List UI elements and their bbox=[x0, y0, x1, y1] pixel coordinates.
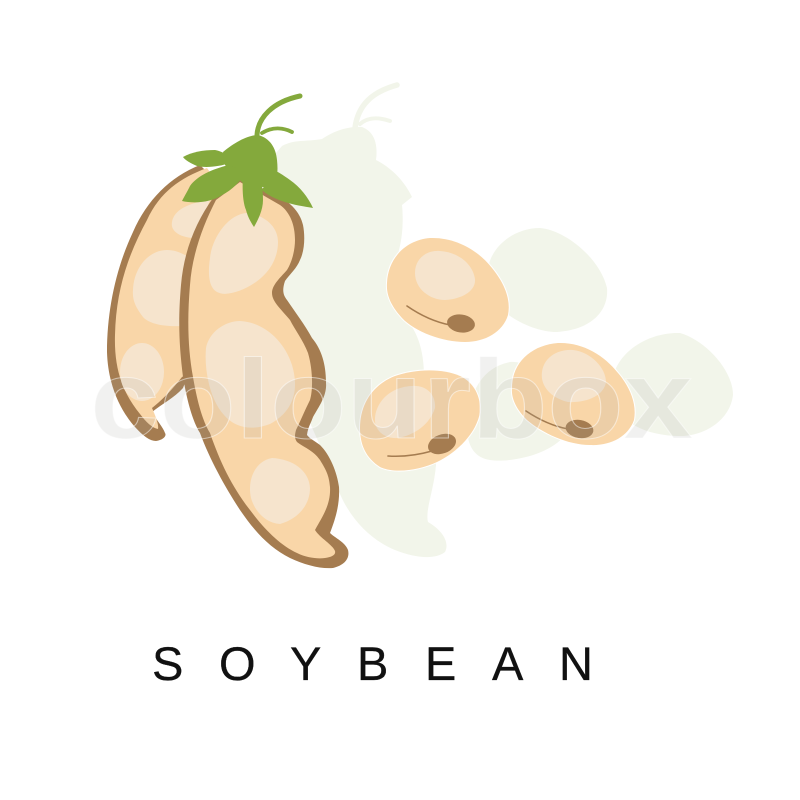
shadow: bean 1 bbox=[487, 228, 607, 332]
shadow: tendril bbox=[360, 118, 390, 124]
front pod fill bbox=[188, 182, 335, 558]
back pod outline bbox=[107, 165, 225, 441]
pale shadow of the pods bbox=[265, 85, 446, 557]
back pod seed bumps bbox=[120, 200, 210, 401]
back pod fill bbox=[115, 168, 230, 429]
bean 2 body bbox=[360, 370, 480, 471]
bean 2 hilum bbox=[425, 430, 459, 458]
calyx and stem bbox=[182, 96, 313, 227]
bean 3 body bbox=[512, 343, 635, 445]
calyx lower-left leaf bbox=[182, 165, 246, 202]
back pod top bump bbox=[172, 200, 210, 238]
bean 1 bbox=[387, 238, 509, 342]
front pod bbox=[179, 180, 348, 568]
front pod middle seed bump bbox=[206, 321, 295, 428]
back pod middle bump bbox=[132, 250, 186, 326]
shadow: bean 3 bbox=[612, 333, 733, 436]
tendril bbox=[262, 128, 292, 133]
bean 3 hilum bbox=[564, 418, 595, 440]
bean 2 bbox=[360, 370, 480, 471]
calyx body bbox=[223, 135, 277, 188]
stem bbox=[257, 96, 300, 135]
back pod bbox=[107, 166, 212, 441]
bean 1 hilum bbox=[446, 313, 476, 334]
bean 3 bbox=[512, 343, 635, 445]
bean 3 seam bbox=[526, 411, 568, 429]
calyx centre leaf bbox=[243, 176, 263, 227]
watermark: colourbox bbox=[90, 337, 693, 462]
bean 2 seam bbox=[388, 451, 432, 456]
soybean illustration bbox=[96, 82, 733, 681]
shadow: pod body bbox=[265, 127, 446, 557]
front pod bottom seed bump bbox=[250, 458, 310, 524]
calyx top-left leaf bbox=[183, 150, 232, 167]
shadow: stem bbox=[355, 85, 397, 128]
back pod lower bump bbox=[120, 343, 164, 401]
calyx right leaf bbox=[262, 170, 313, 208]
bean 1 body bbox=[387, 238, 509, 342]
front pod outline bbox=[179, 180, 348, 568]
bean 1 highlight bbox=[415, 251, 475, 300]
front pod top seed bump bbox=[209, 213, 278, 294]
bean 3 highlight bbox=[542, 350, 606, 402]
bean 1 seam bbox=[407, 306, 450, 325]
shadow: bean 2 bbox=[467, 362, 565, 461]
bean 2 highlight bbox=[375, 386, 435, 438]
title: SOYBEAN bbox=[152, 637, 593, 690]
